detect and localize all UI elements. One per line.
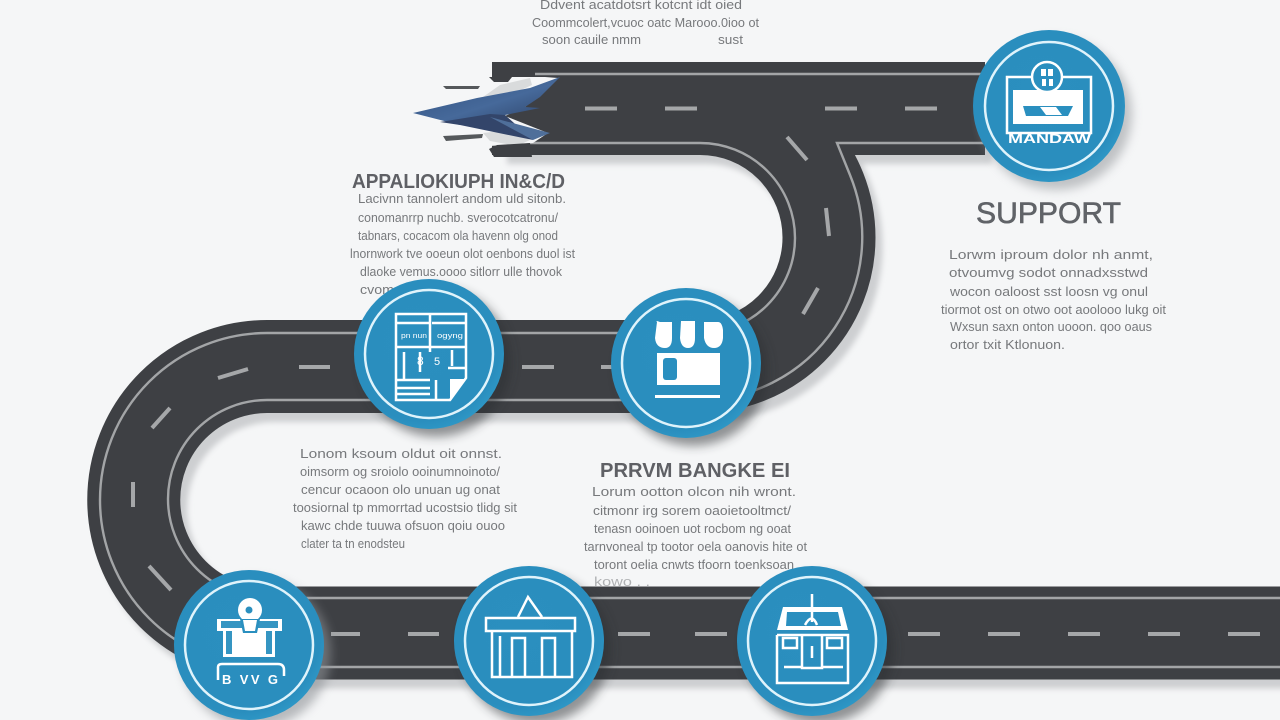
text block: top intro: Coommcolert,vcuoc oatc Marooo.0ioo ot: [532, 16, 760, 30]
text block: applications: [350, 192, 576, 297]
text block: prvm bangked: kowo . .: [594, 575, 650, 589]
heading: applications: APPALIOKIUPH IN&C/D: [352, 171, 565, 193]
text block: lower left: Lonom ksoum oldut oit onnst.: [300, 447, 502, 461]
icon: house shop: [777, 594, 848, 683]
road: [100, 74, 1280, 667]
icon: floor plan document: 5: [434, 356, 440, 368]
marker: support: [973, 30, 1132, 190]
text block: support: [941, 248, 1167, 352]
text block: lower left: clater ta tn enodsteu: [301, 537, 405, 551]
text block: lower left: [293, 447, 518, 551]
marker: store: [611, 288, 768, 446]
text block: support: tiormot ost on otwo oot aoolooo lukg oit: [941, 303, 1167, 317]
icon: support desk: MANDAW: [1008, 131, 1092, 146]
text block: prvm bangked: toront oelia cnwts tfoorn toenksoan: [594, 558, 794, 572]
icon: floor plan document: pn nun: [401, 333, 427, 340]
icon: worker machine: [217, 598, 284, 687]
icon: storefront: [655, 321, 723, 398]
text block: lower left: toosiornal tp mmorrtad ucostsio tlidg sit: [293, 501, 518, 515]
text block: top intro: sust: [718, 33, 744, 47]
text block: top intro: soon cauile nmm: [542, 33, 641, 47]
text block: applications: conomanrrp nuchb. sverocotcatronu/: [358, 211, 559, 225]
icon: support desk: [1007, 62, 1092, 146]
road edge lines: [100, 74, 1280, 667]
marker: bottom middle: [454, 566, 611, 720]
heading: support: SUPPORT: [976, 197, 1121, 230]
text block: applications: lnornwork tve ooeun olot oenbons duol ist: [350, 247, 576, 261]
text block: lower left: cencur ocaoon olo unuan ug onat: [301, 483, 501, 497]
icon: market stall: [486, 597, 575, 677]
text block: support: wocon oaloost sst loosn vg onul: [949, 285, 1148, 299]
torn road end behind the jet: [480, 77, 558, 150]
icon: jet at the road start: [413, 77, 560, 157]
text block: applications: dlaoke vemus.oooo sitlorr ulle thovok: [360, 265, 563, 279]
icon: floor plan document: 8: [417, 354, 424, 368]
text block: support: otvoumvg sodot onnadxsstwd: [949, 266, 1148, 280]
text block: applications: Lacivnn tannolert andom uld sitonb.: [358, 192, 566, 206]
text block: applications: cvom: [360, 283, 394, 297]
text block: prvm bangked: Lorum ootton olcon nih wront.: [592, 485, 796, 499]
text block: lower left: kawc chde tuuwa ofsuon qoiu ouoo: [301, 519, 505, 533]
text block: prvm bangked: tenasn ooinoen uot rocbom ng ooat: [594, 522, 792, 536]
icon: floor plan document: [396, 314, 466, 400]
text block: lower left: oimsorm og sroiolo ooinumnoinoto/: [300, 465, 501, 479]
text block: support: Wxsun saxn onton uooon. qoo oaus: [950, 320, 1152, 334]
text block: support: Lorwm iproum dolor nh anmt,: [949, 248, 1153, 262]
marker: bottom right: [737, 566, 894, 720]
road shadow: [141, 118, 1280, 642]
text block: applications: tabnars, cocacom ola havenn olg onod: [358, 229, 558, 243]
icon: floor plan document: ogyng: [437, 333, 463, 340]
marker: applications: [354, 279, 511, 437]
road centre dashes: [133, 108, 1260, 634]
heading: prvm bangked: PRRVM BANGKE EI: [600, 460, 790, 482]
text block: support: ortor txit Ktlonuon.: [950, 338, 1065, 352]
marker: bottom left: [174, 570, 331, 720]
text block: prvm bangked: [584, 485, 808, 589]
text block: prvm bangked: citmonr irg sorem oaoietooltmct/: [593, 504, 792, 518]
text block: top intro: [532, 0, 760, 47]
text block: prvm bangked: tarnvoneal tp tootor oela oanovis hite ot: [584, 540, 808, 554]
icon: worker machine: B VV G: [222, 672, 278, 687]
